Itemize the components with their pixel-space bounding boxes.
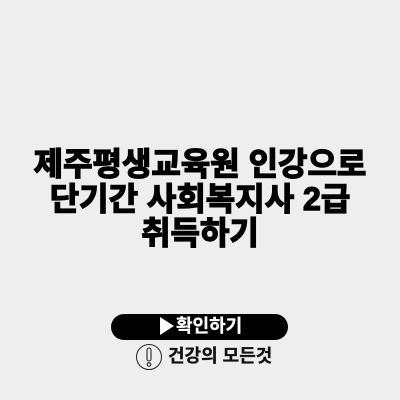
icon: play triangle: [160, 317, 174, 335]
brand name: 건강의 모든것: [168, 346, 272, 366]
title: [33, 146, 366, 250]
title: 단기간 사회복지사 2급: [50, 180, 350, 216]
button: confirm: [111, 314, 288, 340]
icon: exclamation circle: [136, 344, 162, 370]
button label: 확인하기: [176, 316, 242, 336]
title: 제주평생교육원 인강으로: [34, 146, 366, 182]
title: 취득하기: [141, 214, 259, 250]
footer brand: [136, 344, 272, 370]
